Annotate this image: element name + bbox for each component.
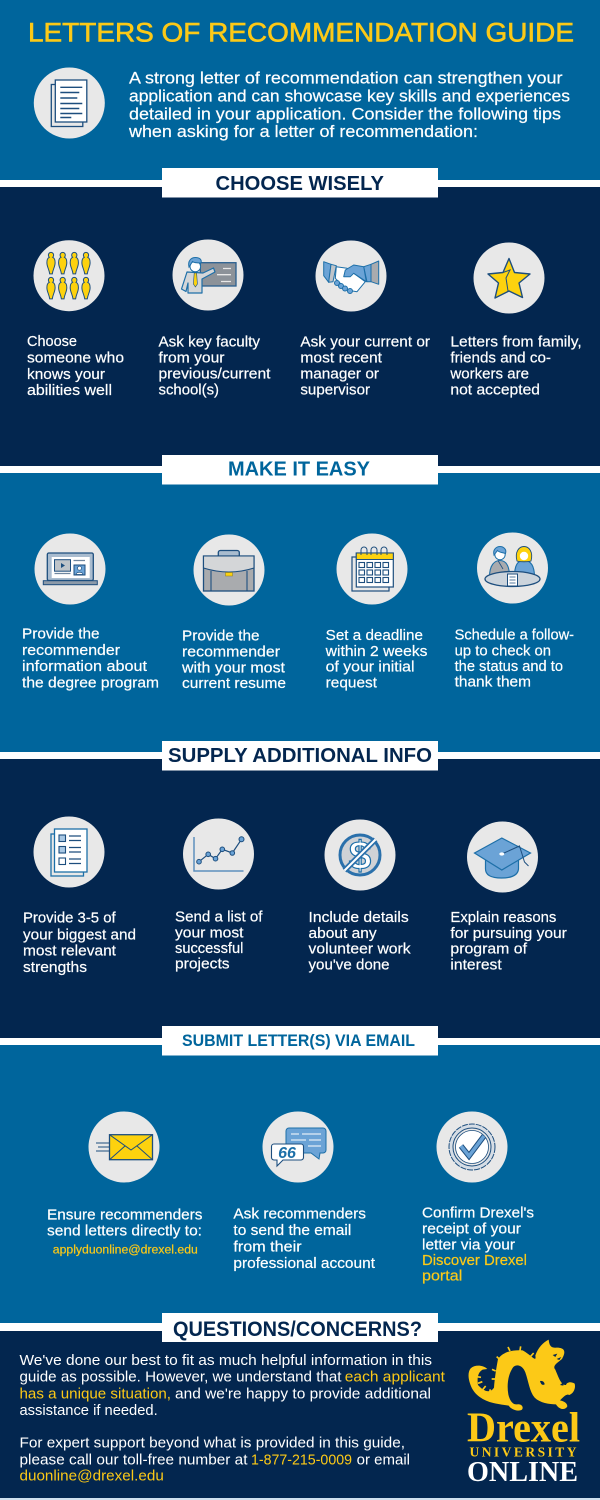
tip text: Provide the (22, 627, 100, 643)
tip text (450, 910, 567, 973)
heading: submit letters via email (162, 1026, 438, 1056)
tip text: Send a list of (175, 909, 263, 925)
tip text (308, 910, 411, 973)
icon: no money: $ (349, 834, 371, 878)
tip text: Ensure recommenders (47, 1207, 202, 1223)
intro text (128, 69, 570, 141)
tip text: previous/current (158, 367, 270, 383)
tip text (455, 627, 574, 691)
contact text: assistance if needed. (20, 1403, 158, 1419)
logo: Drexel University Online: UNIVERSITY (470, 1445, 577, 1460)
icon: checklist (34, 816, 104, 888)
contact text (20, 1353, 445, 1485)
icon: speech bubbles (262, 1112, 334, 1182)
tip text (175, 909, 263, 973)
logo: Drexel University Online (467, 1340, 580, 1488)
contact text: has a unique situation, (20, 1386, 171, 1402)
tip text: school(s) (158, 382, 219, 398)
icon: speech bubbles: 66 (278, 1145, 296, 1162)
tip text: the status and to (455, 659, 563, 675)
tip text: applyduonline@drexel.edu (53, 1244, 198, 1256)
tip text: Choose (27, 334, 77, 350)
tip text (47, 1207, 202, 1256)
intro text: when asking for a letter of recommendation: (128, 123, 478, 141)
tip text: send letters directly to: (47, 1223, 202, 1239)
tip text (158, 335, 270, 398)
tip text: information about (22, 659, 147, 675)
contact text: 1-877-215-0009 (251, 1452, 352, 1468)
panel: supply additional info (0, 741, 600, 1038)
icon: calendar (336, 534, 408, 604)
heading: supply additional info: SUPPLY ADDITIONAL INFO (168, 745, 432, 767)
icon: no money (324, 820, 396, 890)
heading: submit letters via email: SUBMIT LETTER(S) VIA EMAIL (182, 1032, 415, 1050)
tip: key faculty (158, 240, 270, 398)
tip text: interest (450, 957, 502, 973)
tip text: volunteer work (308, 942, 411, 958)
contact text: We've done our best to fit as much helpful information in this (20, 1353, 432, 1369)
tip text (23, 911, 136, 976)
icon: seal with check (436, 1112, 508, 1182)
tip text: successful (175, 941, 243, 957)
heading: choose wisely (162, 168, 438, 198)
tip: volunteer (308, 820, 411, 973)
tip text: strengths (23, 960, 87, 976)
tip text: abilities well (27, 383, 112, 399)
icon: teacher at board (172, 240, 244, 310)
tip text: Ask recommenders (233, 1207, 366, 1223)
tip text: within 2 weeks (325, 644, 428, 660)
tip text: with your most (181, 660, 285, 676)
tip: deadline (325, 534, 428, 691)
tip text: from your (158, 351, 225, 367)
tip text: Provide the (182, 629, 260, 645)
tip text: Set a deadline (326, 628, 423, 644)
tip text: to send the email (233, 1223, 351, 1239)
tip text: someone who (27, 351, 124, 367)
icon: graduation cap (467, 822, 538, 892)
tip text (325, 628, 428, 691)
heading: choose wisely: CHOOSE WISELY (216, 173, 385, 195)
panel: submit letters via email (0, 1026, 600, 1285)
tip text: portal (422, 1269, 462, 1285)
tip text: supervisor (300, 382, 370, 398)
tip: professional account (233, 1112, 375, 1272)
icon: handshake (316, 240, 386, 312)
icon: meeting at table (477, 532, 548, 604)
tip text: about any (308, 926, 377, 942)
tip text (22, 627, 159, 692)
tip text: friends and co- (450, 351, 551, 367)
heading: questions and concerns: QUESTIONS/CONCERNS? (173, 1318, 422, 1341)
tip text: most recent (300, 351, 382, 367)
intro text: A strong letter of recommendation can strengthen your (129, 69, 563, 87)
tip text: not accepted (450, 382, 540, 398)
tip text (422, 1206, 534, 1285)
tip text: Ask key faculty (158, 335, 261, 351)
icon: laptop (34, 534, 106, 604)
tip: not accepted (449, 242, 582, 398)
tip text: knows your (27, 367, 105, 383)
icon: envelope (88, 1112, 160, 1182)
contact text: each applicant (345, 1370, 445, 1386)
tip text: your biggest and (23, 927, 136, 943)
tip: degree information (22, 534, 159, 692)
tip text: up to check on (455, 643, 551, 659)
title: LETTERS OF RECOMMENDATION GUIDE (28, 18, 574, 48)
tip text: the degree program (22, 676, 159, 692)
tip text: thank them (455, 675, 531, 691)
tip text: request (326, 675, 377, 691)
tip text: recommender (182, 645, 280, 661)
tip text (449, 335, 582, 398)
tip text: Ask your current or (300, 335, 430, 351)
tip text: receipt of your (422, 1222, 521, 1238)
icon: star (474, 242, 544, 314)
contact text: please call our toll-free number at (20, 1452, 248, 1468)
tip text: your most (175, 925, 244, 941)
tip text: manager or (300, 367, 379, 383)
tip text: Provide 3-5 of (23, 911, 116, 927)
tip text: letter via your (422, 1237, 515, 1253)
intro text: detailed in your application. Consider the following tips (129, 105, 561, 123)
logo: Drexel University Online: Drexel (467, 1406, 580, 1452)
tip text: program of (450, 942, 528, 958)
heading: make it easy (162, 455, 438, 484)
tip text (181, 629, 286, 692)
tip text: for pursuing your (450, 926, 567, 942)
logo: Drexel University Online: ONLINE (467, 1457, 578, 1488)
tip text (233, 1207, 375, 1272)
heading: supply additional info (162, 741, 438, 770)
panel: make it easy (0, 455, 600, 692)
tip text: most relevant (23, 944, 116, 960)
tip: reasons (450, 822, 567, 973)
intro text: application and can showcase key skills and experiences (129, 87, 570, 105)
tip text: Schedule a follow- (455, 627, 574, 643)
contact text: guide as possible. However, we understand that (20, 1370, 342, 1386)
tip text: Discover Drexel (422, 1253, 527, 1269)
tip text: Explain reasons (450, 910, 556, 926)
heading: make it easy: MAKE IT EASY (228, 458, 371, 480)
tip text: recommender (22, 643, 120, 659)
tip text: Confirm Drexel's (422, 1206, 534, 1222)
tip: choose someone (27, 240, 124, 399)
icon: dragon (469, 1340, 575, 1411)
tip text: Letters from family, (450, 335, 582, 351)
tip text: workers are (449, 367, 529, 383)
contact text: For expert support beyond what is provided in this guide, (20, 1436, 405, 1452)
tip text: you've done (308, 957, 390, 973)
tip text (300, 335, 430, 398)
panel: choose wisely (0, 168, 600, 466)
contact text: or email (357, 1452, 410, 1468)
icon: group of people (34, 240, 104, 311)
tip: confirm receipt (422, 1112, 534, 1285)
icon: briefcase (194, 534, 264, 606)
tip text: current resume (182, 676, 286, 692)
icon: document stack (34, 68, 105, 138)
tip text (27, 334, 124, 399)
tip: send directly (47, 1112, 202, 1256)
tip text: of your initial (326, 660, 414, 676)
panel: questions and concerns (0, 1313, 600, 1500)
tip text: professional account (233, 1256, 375, 1272)
tip text: projects (175, 957, 230, 973)
contact text: and we're happy to provide additional (175, 1386, 431, 1402)
tip text: Include details (308, 910, 409, 926)
tip text: from their (233, 1239, 302, 1255)
tip: resume (181, 534, 286, 692)
icon: line chart (183, 818, 254, 890)
tip: follow up (455, 532, 574, 691)
tip: manager (300, 240, 430, 398)
tip: strengths (23, 816, 136, 976)
tip: projects (175, 818, 263, 973)
contact text: duonline@drexel.edu (20, 1469, 164, 1485)
